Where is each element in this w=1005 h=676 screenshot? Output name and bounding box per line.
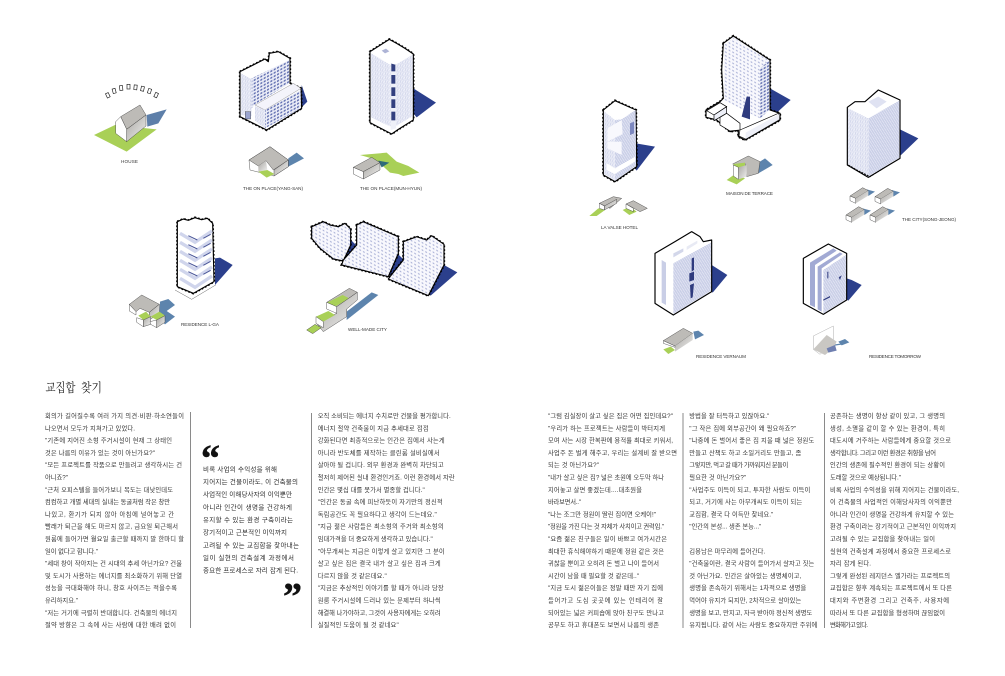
diagram: the city massing [846, 188, 900, 222]
text column 1: 회의가 길어질수록 여러 가지 의견·비판·하소연들이 [45, 411, 184, 420]
text column 2: 에너지 절약 건축물이 지금 추세대로 점점 [318, 423, 429, 432]
building: la valse hotel [603, 101, 655, 182]
building: the on place mun-hyun [370, 39, 436, 134]
text column 4: 김용남은 마무리에 들어간다. [689, 546, 766, 555]
diagram: la valse massing [589, 197, 647, 216]
text column 3: "내가 살고 싶은 집? 넓은 초원에 오두막 하나 [548, 472, 664, 482]
text column 2: "지금 젊은 사람들은 최소형의 주거와 최소형의 [318, 522, 444, 531]
text column 4: 필요한 것 아닌가요?" [689, 472, 746, 482]
text column 3: 사업주 돈 벌게 해주고, 우리는 설계비 잘 받으면 [548, 448, 677, 457]
text column 4: "그 작은 집에 외부공간이 왜 필요하죠?" [689, 423, 796, 432]
text column 2: 철저히 제어된 실내 환경인거죠. 이런 환경에서 자란 [318, 472, 455, 482]
label: house: HOUSE [121, 159, 138, 164]
pull quote [201, 438, 302, 618]
text column 2: 강화된다면 최종적으로는 인간은 집에서 사는게 [318, 436, 445, 445]
text column 1: "기존에 지어진 소형 주거시설이 현재 그 상태인 [45, 436, 172, 445]
section heading [46, 380, 102, 395]
diagram: l-ga massing [129, 295, 175, 328]
text column 4: 교집합, 결국 다 이득만 찾네요." [689, 509, 773, 518]
pull quote: 비록 사업의 수익성을 위해 [203, 464, 277, 473]
text column 2: 살아야 될 겁니다. 외부 환경과 완벽히 차단되고 [318, 460, 444, 469]
text column 4: "사업주도 이득이 되고, 투자한 사람도 이득이 [689, 485, 810, 494]
building: residence vernaum [655, 232, 727, 315]
text column 1: "세대 창이 작아지는 건 시대의 추세 아닌가요? 건물 [45, 559, 182, 568]
text column 3: 공부도 하고 휴대폰도 보면서 나름의 생존 [548, 620, 659, 629]
building: residence tomorrow [803, 244, 862, 314]
text column 1: 성능을 극대화해야 하니, 창호 사이즈는 적을수록 [45, 583, 177, 592]
text column 1: 원룸에 들어가면 월요일 출근할 때까지 말 한마디 할 [45, 534, 184, 543]
text column 5: 교집합은 향후 계속되는 프로젝트에서 또 다른 [830, 583, 952, 592]
text column 1: "근처 오피스텔을 들어가보니 복도는 대낮인데도 [45, 485, 173, 494]
text column 2: 임대가격을 더 중요하게 생각하고 있습니다." [318, 534, 433, 543]
diagram: maison de terrace massing [727, 156, 773, 184]
text column 5: 인간의 생존에 필수적인 환경이 되는 상황이 [830, 460, 945, 469]
text column 5: 공존하는 생명이 항상 같이 있고, 그 생명의 [830, 411, 945, 420]
text column 4: "건축물이란, 결국 사람이 들어가서 살자고 짓는 [689, 559, 815, 568]
text column 4: 생명을 보고, 만지고, 자극 받아야 정신적 생명도 [689, 608, 813, 617]
diagram: mun-hyun massing [353, 153, 419, 179]
text column 4: 생명을 존속하기 위해서는 1차적으로 생명을 [689, 583, 807, 592]
label: residence l-ga: RESIDENCE L-GA [181, 322, 220, 327]
pull quote: 장기적이고 근본적인 이익까지 [203, 528, 287, 537]
text column 2: 독립공간도 꼭 필요하다고 생각이 드는데요." [318, 509, 437, 518]
text column 3: "나는 조그만 정원이 딸린 집이면 오케이!" [548, 509, 656, 518]
text column 5: 변화해가고 있다. [830, 620, 868, 629]
text column 2: 살고 싶은 집은 결국 내가 살고 싶은 집과 크게 [318, 559, 441, 568]
text column 1 [45, 411, 184, 629]
text column 5: 실현의 건축설계 과정에서 중요한 프로세스로 [830, 546, 951, 555]
text column 3: 되는 것 아닌가요?" [548, 460, 599, 469]
text column 4: "나중에 돈 벌어서 좋은 집 지을 때 넓은 정원도 [689, 436, 815, 445]
label: la valse hotel: LA VALSE HOTEL [601, 225, 638, 230]
label: residence tomorrow: RESIDENCE TOMORROW [869, 354, 922, 359]
text column 2: 해결해 나가야하고, 그것이 사용자에게는 오히려 [318, 608, 441, 617]
text column 4: 되고, 거기에 사는 아무개씨도 이득이 되는 [689, 497, 803, 506]
text column 3: "요즘 젊은 친구들은 일이 바쁘고 여가시간은 [548, 534, 667, 543]
text column 5: 비록 사업의 수익성을 위해 지어지는 건물이라도, [830, 485, 959, 494]
text column 5: 아니라 인간이 생명을 건강하게 유지할 수 있는 [830, 509, 954, 518]
pull quote: 유지할 수 있는 환경 구축이라는 [203, 515, 293, 524]
text column 1: 빨래가 퇴근을 해도 마르지 않고, 금요일 퇴근해서 [45, 522, 178, 531]
label: residence vernaum: RESIDENCE VERNAUM [696, 354, 746, 359]
pull quote: 사업적인 이해당사자의 이익뿐만 [203, 490, 292, 499]
text column 3: 모여 사는 시장 한복판에 용적률 최대로 키워서, [548, 436, 673, 445]
text column 1: "저는 거기에 극렬히 반대합니다. 건축물의 에너지 [45, 608, 177, 617]
text column 3: 최대한 휴식해야하기 때문에 정원 같은 것은 [548, 546, 664, 555]
text column 5: 도래할 것으로 예상됩니다." [830, 472, 901, 482]
text column 1: 나있고, 환기가 되지 않아 아침에 널어놓고 간 [45, 509, 174, 518]
text column 3: "지금 도시 젊은이들은 정말 때만 자기 집에 [548, 583, 663, 592]
text column 1: 유리하지요." [45, 596, 78, 604]
text column 3: 들어가고 도심 곳곳에 있는 인테리어 잘 [548, 596, 663, 604]
text column 4: 것 아닌가요. 인간은 살아있는 생명체이고, [689, 571, 802, 580]
text column 4: 그렇지만, 먹고 갈 때가 가까워지신 분들이 [689, 460, 788, 469]
text column 1: 일이 없다고 합니다." [45, 546, 98, 555]
text column 2: 다르지 않을 것 같은데요." [318, 571, 387, 580]
diagram: vernaum massing [663, 328, 704, 354]
text column 3: 바라보면서.." [548, 497, 581, 506]
text column 5: 따라서 또 다른 교집합을 형성하며 끊임없이 [830, 608, 945, 617]
pull quote: 지어지는 건물이라도, 이 건축물의 [203, 477, 298, 486]
text column 1: 나오면서 모두가 지쳐가고 있었다. [45, 423, 135, 432]
building: maison de terrace [706, 36, 791, 140]
building: the city song-jeong [847, 90, 918, 177]
text column 2: "인간은 동굴 속에 피난하듯이 자기만의 정신적 [318, 497, 443, 506]
text column 5: 대도시에 거주하는 사람들에게 중요할 것으로 [830, 436, 951, 445]
text column 3: "정원을 가진 다는 것 자체가 사치이고 권력임." [548, 522, 664, 531]
text column 2: 실질적인 도움이 될 것 같네요" [318, 620, 399, 629]
text column 5: 그렇게 완성된 레지던스 엘가라는 프로젝트의 [830, 571, 950, 580]
pull quote: 고려될 수 있는 교집합을 찾아내는 [203, 540, 299, 549]
section heading: 교집합 [46, 380, 76, 395]
text column 1: 컴컴하고 개별 세대의 실내는 동굴처럼 작은 창만 [45, 497, 170, 506]
text column 5: 고려될 수 있는 교집합을 찾아내는 일이 [830, 534, 935, 543]
text column 3: 귀찮을 뿐이고 오히려 돈 벌고 나이 들어서 [548, 559, 659, 568]
diagram: yang-san massing [249, 147, 304, 178]
pull quote: 중요한 프로세스로 자리 잡게 된다. [203, 566, 298, 575]
text column 2: 인간은 몇십 대를 못가서 멸종할 겁니다." [318, 485, 425, 494]
text column 1: 아니죠?" [45, 472, 68, 482]
icon: opening quotation mark: “ [201, 438, 220, 480]
section heading: 찾기 [81, 380, 102, 395]
text column 2: "지금은 추상적인 이야기를 할 때가 아니라 당장 [318, 583, 444, 592]
building: well-made city [312, 222, 457, 296]
text column 4: "인간의 본성... 생존 본능..." [689, 522, 761, 531]
diagram: house [94, 84, 167, 152]
text column 5: 대지와 주변환경 그리고 건축주, 사용자에 [830, 596, 949, 604]
text column 4: 유지됩니다. 같이 사는 사람도 중요하지만 주위에 [689, 620, 818, 629]
text column 5: 이 건축물의 사업적인 이해당사자의 이익뿐만 [830, 497, 952, 506]
text column 4: 먹어야 유지가 되지만, 2차적으로 살아있는 [689, 596, 802, 604]
text column 5: 자리 잡게 된다. [830, 559, 871, 568]
text column 3: 되어있는 넓은 커피숍에 앉아 친구도 만나고 [548, 608, 664, 617]
text column 1: 것은 나름의 이유가 있는 것이 아닌가요?" [45, 448, 155, 457]
diagram: well-made city massing [307, 288, 378, 334]
text column 1: 절약 방향은 그 속에 사는 사람에 대한 배려 없이 [45, 620, 176, 629]
text column 5: 생성, 소멸을 같이 할 수 있는 환경이, 특히 [830, 423, 945, 432]
text column 3: 시간이 남을 때 필요할 것 같은데.." [548, 571, 639, 580]
text column 3: "그럼 김실장이 살고 싶은 집은 어떤 집인데요?" [548, 411, 673, 420]
text column 5: 생각합니다. 그리고 이런 환경은 취향을 넘어 [830, 448, 936, 457]
text column 4 [689, 411, 818, 629]
text column 5 [830, 411, 959, 629]
icon: closing quotation mark: ” [283, 576, 302, 618]
text column 3 [548, 411, 677, 629]
text column 5: 환경 구축이라는 장기적이고 근본적인 이익까지 [830, 522, 956, 531]
pull quote: 아니라 인간이 생명을 건강하게 [203, 502, 292, 511]
text column 2 [318, 411, 455, 629]
building: the on place yang-san [240, 52, 307, 130]
label: maison de terrace: MAISON DE TERRACE [726, 191, 773, 196]
label: the on place yang-san: THE ON PLACE(YANG-SAN) [243, 186, 303, 191]
building: residence l-ga [175, 218, 233, 299]
text column 2: 원룸 주거시설에 드러나 있는 문제부터 하나씩 [318, 596, 441, 604]
text column 4: 방법을 잘 터득하고 있잖아요." [689, 411, 769, 420]
text column 4: 만들고 산책도 하고 소일거리도 만들고, 좀 [689, 448, 802, 457]
label: well-made city: WELL-MADE CITY [348, 327, 387, 332]
diagram: tomorrow massing [813, 326, 849, 355]
text column 2: 아니라 반도체를 제작하는 클린룸 설비실에서 [318, 448, 440, 457]
text column 1: "모든 프로젝트를 작품으로 만들려고 생각하시는 건 [45, 460, 182, 469]
text column 3: 지어놓고 살면 좋겠는데....대초원을 [548, 485, 642, 494]
text column 2: 오직 소비되는 에너지 수치로만 건물을 평가합니다. [318, 411, 451, 420]
pull quote: 일이 실현의 건축설계 과정에서 [203, 553, 294, 562]
label: the on place mun-hyun: THE ON PLACE(MUN-HYUN) [360, 186, 422, 191]
text column 1: 및 도시가 사용하는 에너지를 최소화하기 위해 단열 [45, 571, 182, 580]
label: the city song-jeong: THE CITY(SONG-JEONG) [902, 217, 956, 222]
text column 3: "우리가 하는 프로젝트는 사람들이 박터지게 [548, 423, 665, 432]
text column 2: "아무개씨는 지금은 이렇게 살고 있지만 그 분이 [318, 546, 445, 555]
